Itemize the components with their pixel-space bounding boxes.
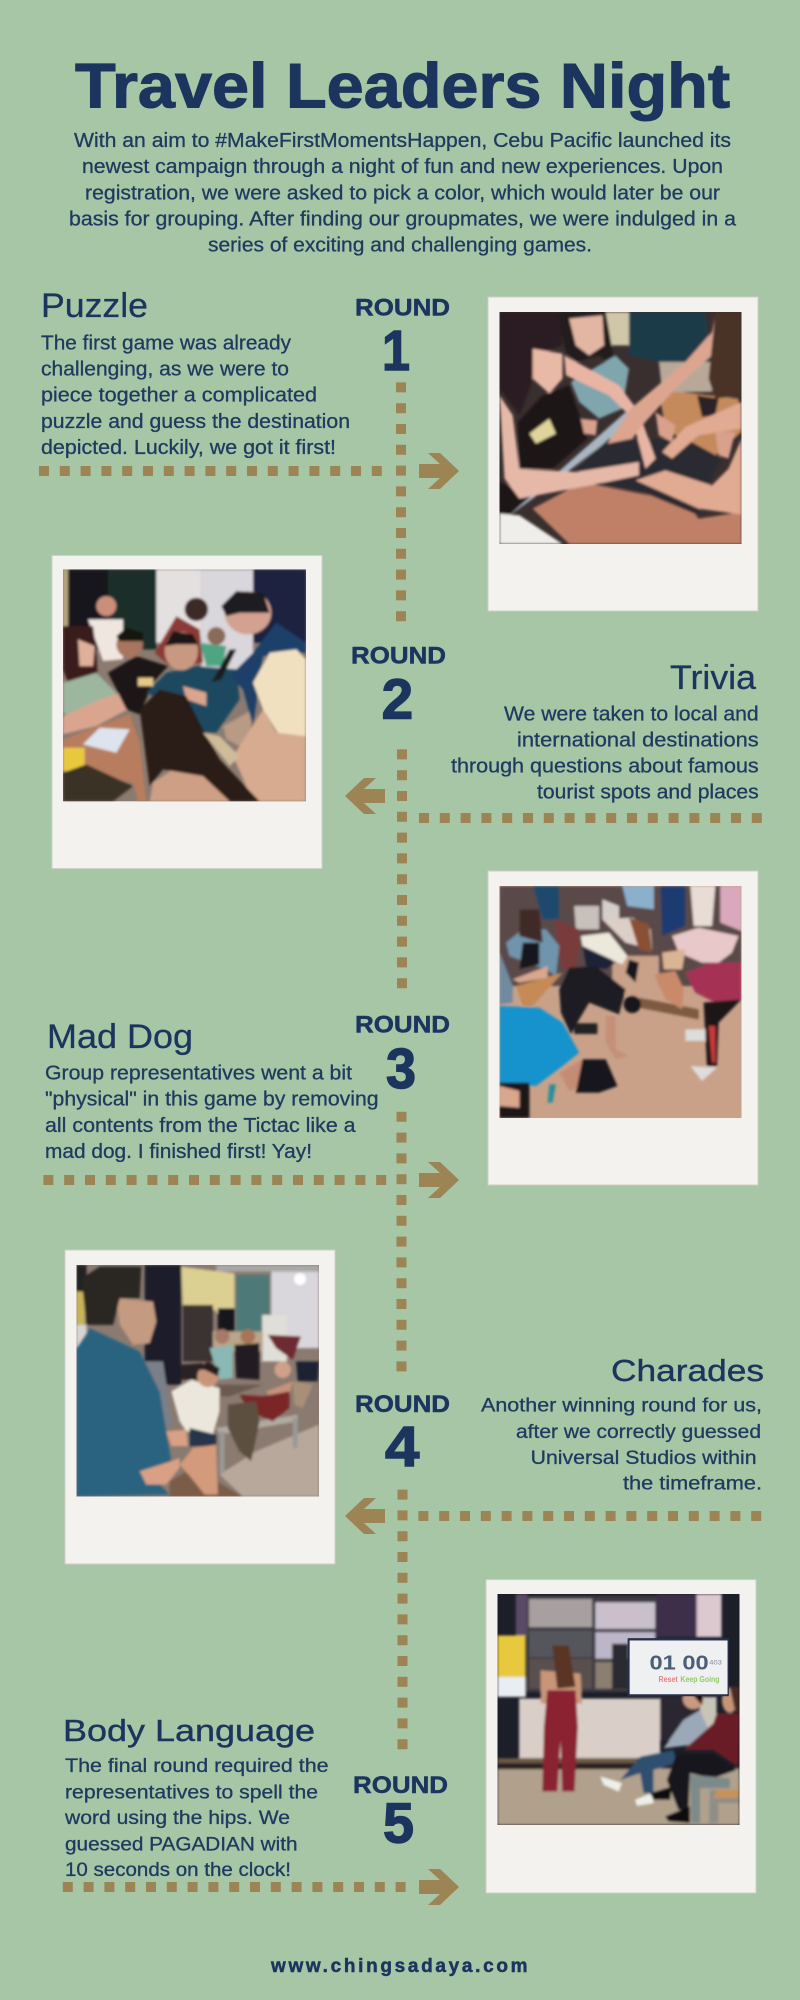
countdown screen in photo: 403 [709,1659,722,1666]
heading: Puzzle: Puzzle [41,287,148,325]
panel: round 1 puzzle [39,287,459,489]
vertical dotted timeline: fourth [398,1490,408,1750]
text: puzzle description [41,332,350,459]
text: body language description: The final round required the [65,1756,329,1777]
panel: round 2 trivia [345,643,763,818]
round label 2: ROUND [351,643,446,670]
arrow left 4 [345,1498,385,1534]
heading: Body Language: Body Language [63,1713,315,1748]
round label 2 [351,643,446,731]
photo: contestant and countdown screen [498,1594,740,1825]
polaroid 1 [488,297,758,611]
text: trivia description: through questions about famous [451,756,759,778]
heading: Trivia: Trivia [670,659,756,697]
text: body language description [64,1756,329,1881]
dotted connector 2 [419,813,763,823]
arrow right 5 [419,1869,459,1905]
footer website: www.chingsadaya.com [270,1956,528,1977]
round label 4: ROUND [355,1391,450,1418]
dotted connector 4 [418,1511,762,1521]
title: Travel Leaders Night [75,52,730,122]
countdown screen in photo: Keep Going [680,1675,720,1684]
intro text [69,130,737,256]
dotted connector 1 [39,466,382,476]
photo: trivia table with host [63,569,306,802]
polaroid 2 [52,556,322,868]
text: trivia description: international destinations [517,730,759,752]
text: body language description: 10 seconds on the clock! [65,1860,291,1881]
round label 1: 1 [382,319,410,383]
text: puzzle description: depicted. Luckily, we got it first! [41,437,336,459]
text: charades description: after we correctly guessed [516,1422,761,1443]
heading: Charades: Charades [611,1353,764,1388]
dotted connector 3 [43,1175,387,1185]
round label 5: ROUND [353,1772,448,1799]
countdown screen in photo: Reset [659,1675,678,1684]
text: puzzle description: puzzle and guess the destination [41,411,350,433]
round label 3: ROUND [355,1012,450,1039]
text: body language description: guessed PAGADIAN with [65,1834,298,1856]
photo: players bending over [500,886,742,1118]
intro text: registration, we were asked to pick a color, which would later be our [85,182,720,204]
photo: hands on puzzle [500,312,742,544]
text: charades description: Universal Studios within [531,1448,757,1469]
vertical dotted timeline: third [396,1112,406,1372]
arrow left 2 [345,778,385,814]
intro text: basis for grouping. After finding our groupmates, we were indulged in a [69,208,737,230]
heading: Mad Dog: Mad Dog [47,1018,193,1056]
text: trivia description: tourist spots and places [537,781,759,803]
round label 3: 3 [386,1037,416,1101]
panel: round 4 charades [345,1353,764,1534]
vertical dotted timeline: second [397,749,407,989]
intro text: With an aim to #MakeFirstMomentsHappen, Cebu Pacific launched its [74,130,731,152]
round label 5: 5 [383,1792,414,1856]
polaroid 3 [488,871,758,1185]
polaroid 4 [65,1250,335,1564]
text: body language description: representatives to spell the [65,1783,318,1804]
text: trivia description: We were taken to local and [504,703,759,725]
dotted connector 5 [63,1882,406,1892]
text: mad dog description: mad dog. I finished first! Yay! [45,1141,312,1163]
round label 1 [355,294,450,383]
text: puzzle description: challenging, as we were to [41,359,289,381]
text: charades description: the timeframe. [623,1474,762,1495]
countdown screen in photo [628,1638,729,1696]
polaroid 5 [486,1580,756,1893]
round label 5 [353,1772,448,1856]
text: mad dog description [45,1063,379,1163]
panel: round 3 mad dog [43,1012,459,1198]
round label 1: ROUND [355,294,450,322]
text: mad dog description: Group representatives went a bit [45,1063,352,1085]
intro text: series of exciting and challenging games. [208,234,592,256]
text: charades description [481,1396,762,1495]
round label 4: 4 [385,1415,420,1479]
round label 2: 2 [382,667,413,731]
intro text: newest campaign through a night of fun and new experiences. Upon [82,156,723,178]
arrow right 1 [419,453,459,489]
text: mad dog description: "physical" in this game by removing [45,1089,379,1111]
photo: host facing the crowd [76,1265,319,1496]
round label 4 [355,1391,450,1479]
arrow right 3 [419,1162,459,1198]
panel: round 5 body language [63,1713,459,1905]
countdown screen in photo: 01 00 [650,1653,709,1675]
text: mad dog description: all contents from the Tictac like a [45,1115,357,1137]
text: charades description: Another winning round for us, [481,1396,762,1417]
text: body language description: word using the hips. We [64,1808,290,1829]
text: puzzle description: piece together a complicated [41,385,317,407]
text: puzzle description: The first game was already [41,332,291,354]
vertical dotted timeline: top [396,382,406,622]
round label 3 [355,1012,450,1101]
text: trivia description [451,703,759,803]
